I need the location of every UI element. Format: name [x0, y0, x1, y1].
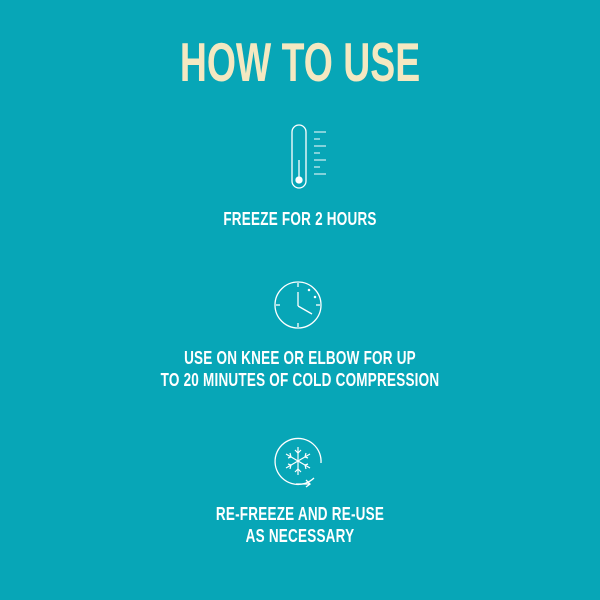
icon: clock: [274, 281, 322, 329]
text: step 3: RE-FREEZE AND RE-USE: [216, 504, 384, 524]
text: step 3: AS NECESSARY: [246, 526, 354, 546]
text: step 2: TO 20 MINUTES OF COLD COMPRESSION: [161, 370, 439, 390]
text: step 1: FREEZE FOR 2 HOURS: [223, 209, 377, 229]
icon: snowflake refreeze: [274, 438, 322, 488]
title: HOW TO USE: [180, 31, 420, 93]
text: step 3: [216, 504, 384, 546]
text: step 2: USE ON KNEE OR ELBOW FOR UP: [184, 348, 416, 368]
text: step 2: [160, 348, 439, 390]
icon: thermometer: [291, 124, 326, 189]
